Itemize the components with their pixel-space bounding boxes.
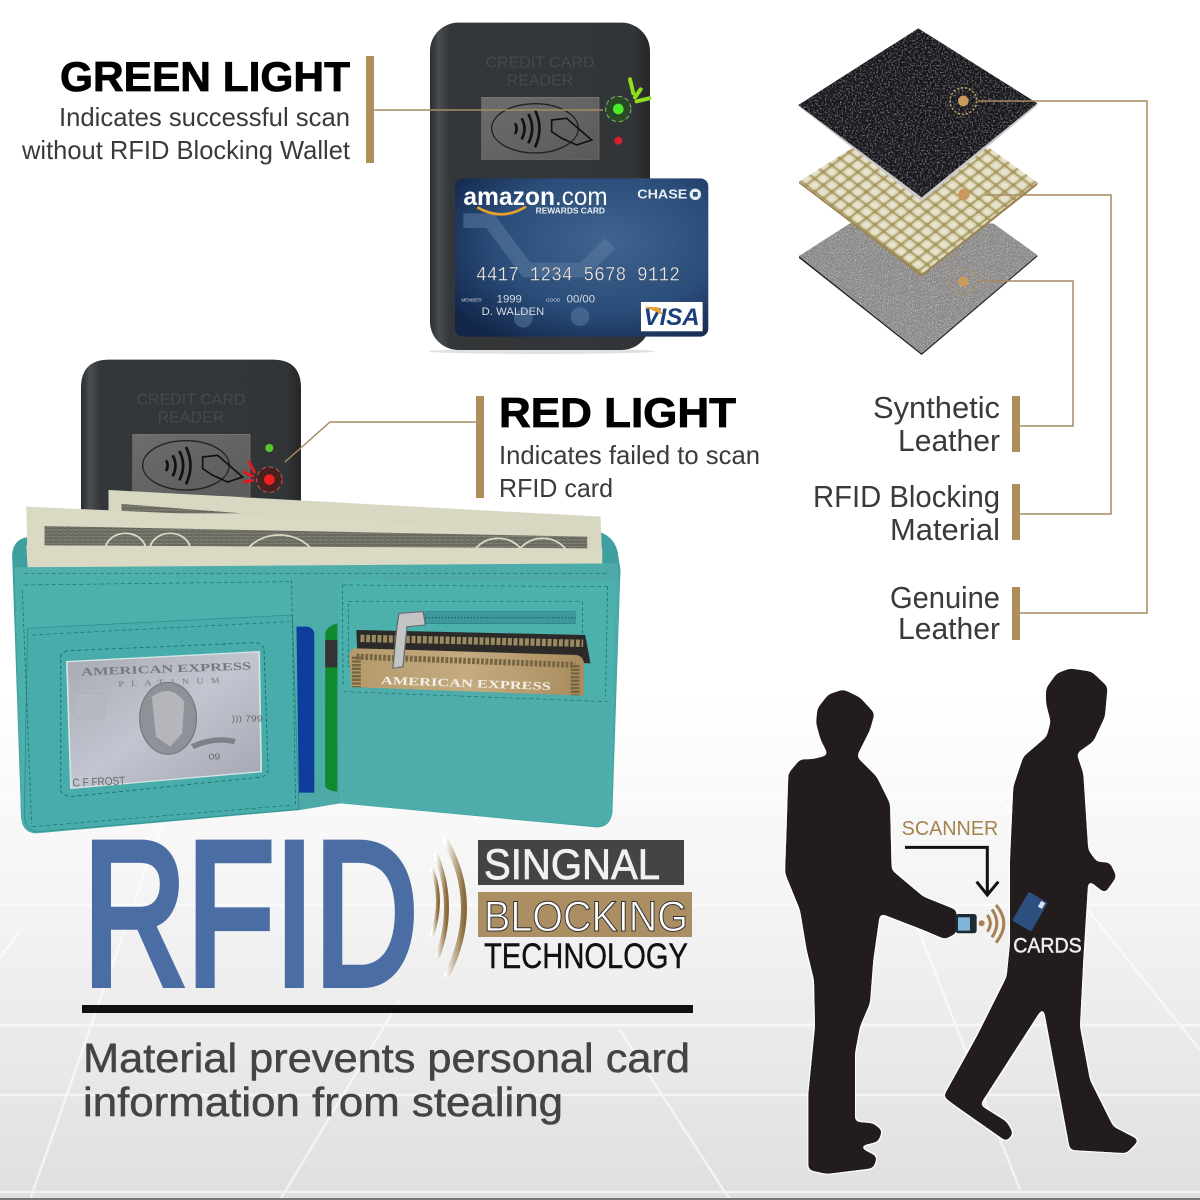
reader label: CREDIT CARD: [486, 54, 594, 71]
right panel: AMERICAN EXPRESS: [381, 674, 551, 693]
wallet back: [12, 531, 620, 833]
label: synthetic leather: Leather: [898, 423, 1000, 458]
wallet: [12, 490, 620, 833]
card portrait: [140, 682, 196, 754]
silhouette: walking man: [943, 668, 1139, 1153]
text block: red light description: Indicates failed to scan: [499, 440, 760, 470]
blocking label: BLOCKING: [484, 893, 688, 941]
cart watermark: [463, 221, 610, 328]
reader body: [81, 360, 301, 514]
gold card: [349, 648, 584, 700]
left panel: [19, 573, 610, 833]
layer: RFID blocking material: [799, 148, 1037, 277]
technology label: TECHNOLOGY: [484, 937, 688, 976]
stolen card: [1012, 892, 1048, 932]
ID window with platinum card: [67, 652, 263, 789]
label: genuine leather: Leather: [898, 611, 1000, 646]
contactless panel: [482, 97, 599, 159]
gold bar: green light: [366, 56, 374, 163]
tagline: [83, 1035, 690, 1125]
card details: 09: [209, 752, 220, 762]
label: RFID blocking material: [813, 479, 1000, 547]
shadow: [428, 349, 655, 354]
text block: green light description: without RFID Blocking Wallet: [21, 135, 351, 165]
card issuer: PLATINUM: [118, 676, 220, 688]
credit card: amazon: REWARDS CARD: [536, 205, 605, 215]
cards label: CARDS: [1013, 933, 1082, 957]
scanner device: [956, 914, 977, 933]
amazon logo: amazon: [463, 183, 555, 211]
credit card reader with green light: [428, 23, 708, 354]
credit card: amazon: .com: [555, 183, 608, 211]
text block: red light description: [499, 440, 760, 503]
center cards: [296, 623, 337, 793]
reader label: [486, 54, 594, 89]
text block: green light description: [21, 102, 351, 165]
card details: MEMBER: [461, 298, 482, 303]
scene: scanner and victim: [785, 668, 1139, 1174]
wallet lining top: [15, 563, 620, 833]
green LED: [606, 79, 649, 122]
reader label: READER: [507, 72, 573, 89]
silhouette: scanner man: [785, 689, 957, 1174]
gold bars: material labels: [1012, 396, 1020, 640]
label: RFID blocking material: RFID Blocking: [813, 479, 1000, 514]
tagline: information from stealing: [83, 1079, 563, 1125]
tagline: Material prevents personal card: [83, 1035, 690, 1081]
green LED off: [265, 444, 273, 452]
label: synthetic leather: Synthetic: [873, 390, 1000, 425]
heading: green light: GREEN LIGHT: [60, 53, 350, 100]
layer: synthetic leather: [798, 28, 1037, 202]
signal waves: [432, 840, 464, 975]
divider: [82, 1005, 693, 1013]
connectors: material layers: [978, 101, 1147, 613]
text block: red light description: RFID card: [499, 473, 613, 503]
card details: ))) 799: [232, 714, 263, 724]
heading: red light: RED LIGHT: [499, 389, 736, 436]
credit card: amazon: [455, 178, 708, 337]
signal label: SINGNAL: [484, 841, 660, 889]
card details: 1999: [497, 294, 522, 306]
card number: 4417 1234 5678 9112: [476, 265, 680, 288]
gold bar: red light: [476, 396, 484, 498]
connector: red light: [285, 422, 476, 462]
label: RFID blocking material: Material: [890, 512, 1000, 547]
card issuer: AMERICAN EXPRESS: [81, 660, 252, 678]
chase logo: CHASE: [637, 188, 687, 202]
card issuer: [81, 660, 252, 690]
layer: genuine leather: [799, 223, 1037, 355]
visa logo: VISA: [644, 304, 700, 331]
reader label: CREDIT CARD: [137, 391, 245, 408]
card details: GOOD: [546, 298, 561, 303]
banknotes: [26, 490, 602, 598]
card details: C F FROST: [72, 774, 126, 789]
label: genuine leather: [890, 580, 1000, 646]
card details: D. WALDEN: [482, 306, 544, 318]
red LED: [614, 137, 622, 145]
card chip: [75, 693, 105, 718]
reader body: [430, 23, 650, 350]
credit card reader with red light: [81, 360, 301, 514]
reader label: READER: [158, 409, 224, 426]
card details: [461, 294, 595, 318]
signal waves: [979, 905, 1004, 943]
right panel: [339, 580, 616, 826]
red LED: [244, 462, 282, 492]
zipper: [425, 612, 575, 624]
contactless panel: [133, 434, 250, 496]
connector: green light: [374, 109, 603, 111]
reader label: [137, 391, 245, 426]
text block: green light description: Indicates successful scan: [59, 102, 350, 132]
card details: [72, 714, 263, 789]
zipper pull: [393, 612, 425, 668]
label: genuine leather: Genuine: [890, 580, 1000, 615]
front pocket: [339, 687, 612, 825]
card details: 00/00: [567, 294, 595, 306]
RFID logo: RFID: [83, 800, 418, 1028]
scanner label: SCANNER: [902, 817, 998, 840]
arrow: [905, 847, 998, 895]
label: synthetic leather: [873, 390, 1000, 458]
material layers: [798, 28, 1037, 355]
